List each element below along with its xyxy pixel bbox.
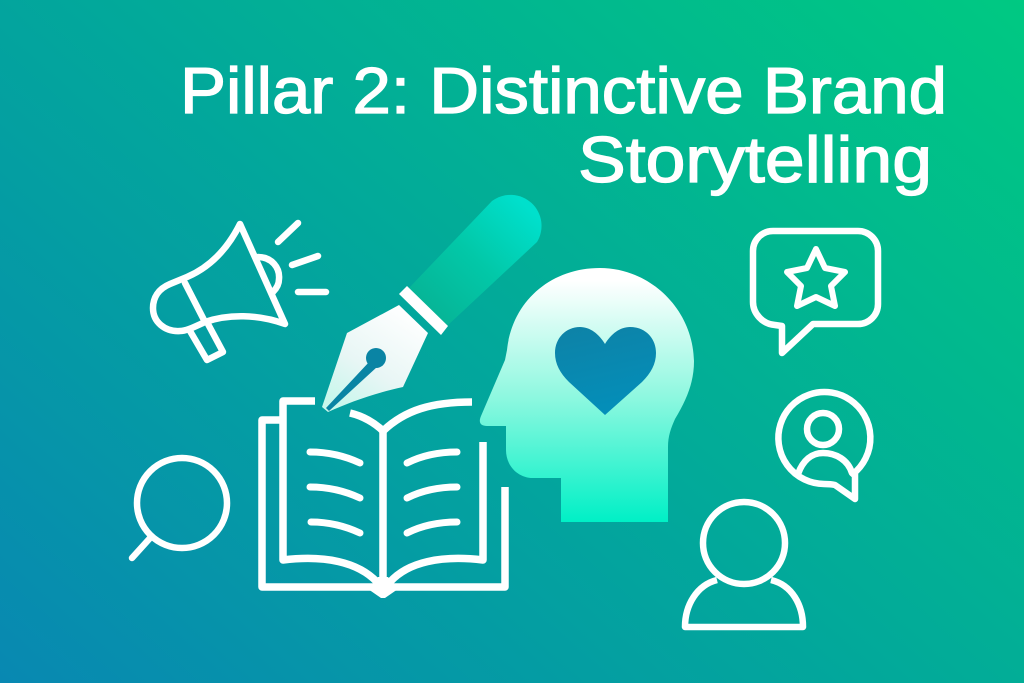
icon: user [685, 502, 803, 627]
icon: fountain pen [322, 195, 542, 412]
pen nib [322, 305, 428, 412]
heart [555, 327, 656, 415]
title: Storytelling [578, 123, 932, 196]
title: Pillar 2: Distinctive Brand [180, 54, 947, 127]
icon: open book [262, 401, 505, 598]
pen collar [399, 286, 448, 335]
icon: megaphone [153, 223, 326, 360]
icon: magnifying glass [132, 458, 227, 558]
title [180, 54, 947, 196]
head silhouette [480, 268, 694, 522]
nib slit [326, 348, 386, 411]
icon: user in speech circle [778, 392, 870, 499]
icon: speech bubble with star [753, 231, 878, 353]
icon: head with heart [480, 268, 694, 522]
pen barrel [409, 195, 542, 326]
